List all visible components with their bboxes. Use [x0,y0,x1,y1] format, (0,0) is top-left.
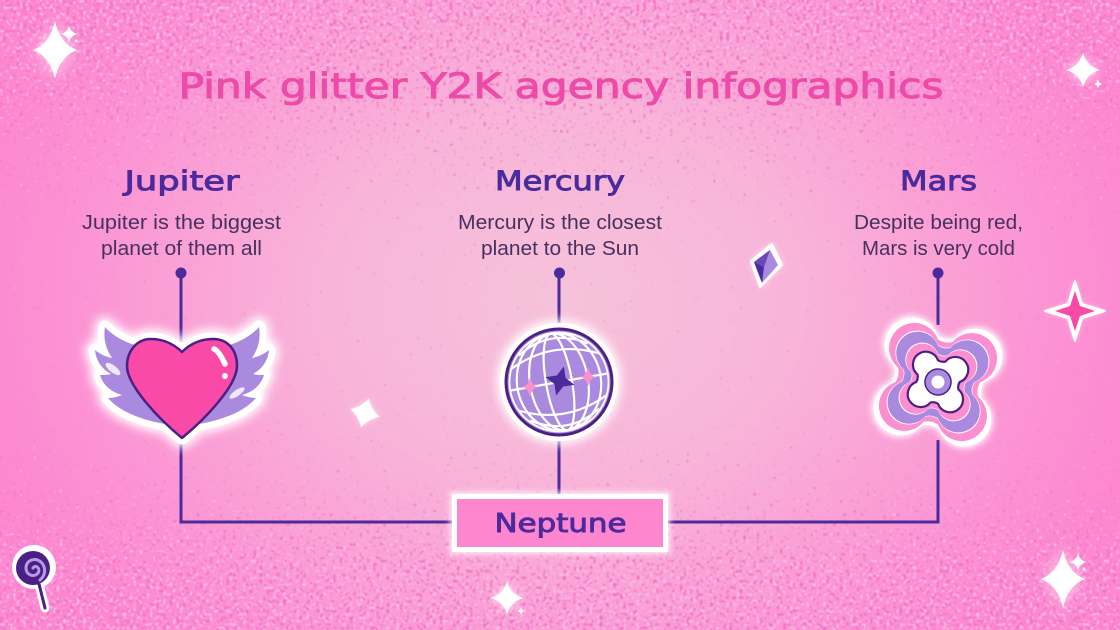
column: Mercury [458,166,662,260]
icon: crystal [750,243,783,288]
icon: pink star [1044,280,1106,342]
text: Jupiter description: Jupiter is the biggest [82,212,281,234]
heading: Mars: Mars [900,166,977,197]
icon: disco globe [497,320,621,444]
sparkle: top left [33,21,78,79]
sparkle: top right [1066,53,1102,88]
text: Mercury description: Mercury is the closest [458,212,662,234]
heading: Jupiter: Jupiter [122,166,241,197]
icon: layered flower [867,311,1009,453]
sparkle: middle left [347,395,383,431]
box: Neptune [450,492,670,554]
column: Jupiter [82,166,281,260]
text: Mars description: Mars is very cold [862,238,1015,260]
text: Jupiter description [82,212,281,260]
text: Mercury description: planet to the Sun [481,238,639,260]
heading: Mercury: Mercury [495,166,625,197]
text: Mars description [854,212,1023,260]
text: Jupiter description: planet of them all [101,238,262,260]
text: Mercury description [458,212,662,260]
sparkle: bottom right [1041,550,1086,608]
label: Neptune: Neptune [494,509,626,539]
sparkle: bottom centre [490,582,524,614]
icon: lollipop [12,545,56,608]
connector lines [177,269,942,522]
column: Mars [854,166,1023,260]
icon: winged heart [95,327,269,438]
text: Mars description: Despite being red, [854,212,1023,234]
title: Pink glitter Y2K agency infographics [178,67,944,107]
